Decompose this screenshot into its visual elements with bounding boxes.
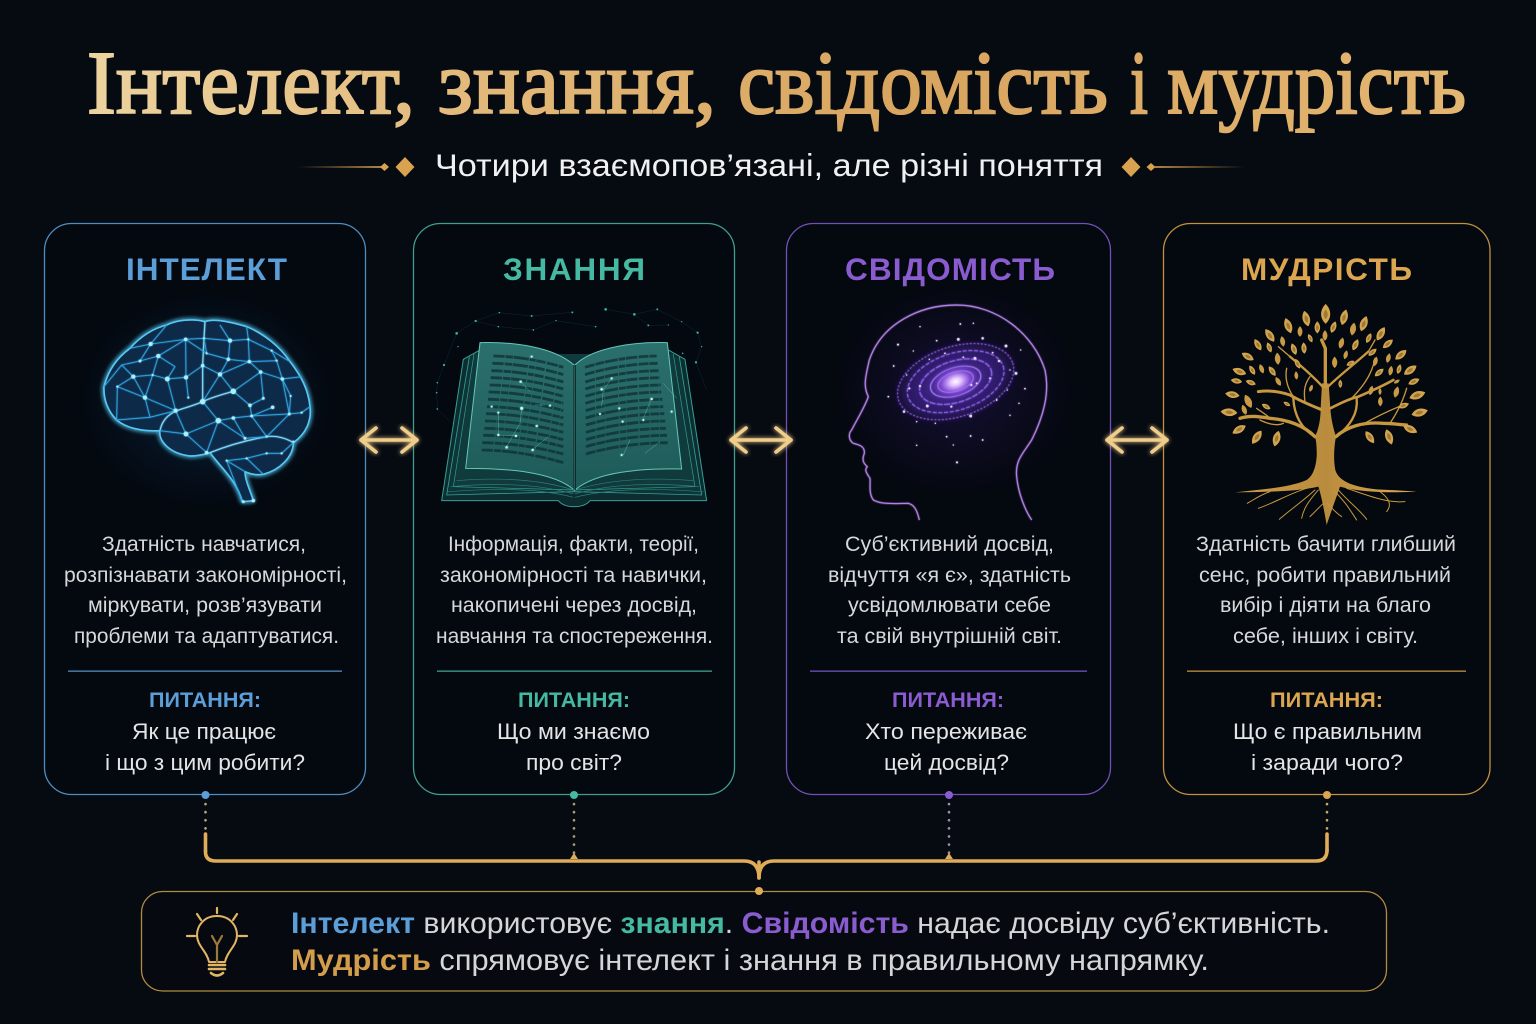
arrow: consciousness to wisdom	[1107, 428, 1167, 452]
icon: light bulb	[187, 908, 247, 976]
question: knowledge: Що ми знаємо	[497, 719, 650, 744]
description: wisdom: вибір і діяти на благо	[1220, 594, 1431, 617]
panel: intellect	[44, 224, 366, 794]
title: мудрість	[1167, 34, 1466, 133]
question: intellect: і що з цим робити?	[105, 750, 305, 775]
description: wisdom: сенс, робити правильний	[1199, 564, 1451, 587]
title: і	[1130, 34, 1148, 133]
description: wisdom: себе, інших і світу.	[1233, 625, 1418, 648]
summary text: Інтелект використовує знання. Свідомість надає досвіду суб’єктивність.	[291, 907, 1330, 940]
question: consciousness: цей досвід?	[884, 750, 1009, 775]
question: knowledge: про світ?	[526, 750, 622, 775]
icon: head with galaxy	[836, 283, 1076, 520]
description: knowledge: накопичені через досвід,	[451, 594, 697, 617]
description: wisdom: Здатність бачити глибший	[1196, 533, 1456, 556]
icon: golden tree	[1220, 304, 1429, 525]
panel: wisdom	[1164, 224, 1490, 794]
question: intellect: Як це працює	[132, 719, 276, 744]
question: wisdom: ПИТАННЯ:	[1270, 689, 1383, 712]
summary text: Мудрість спрямовує інтелект і знання в правильному напрямку.	[291, 944, 1209, 977]
summary text	[291, 907, 1330, 977]
question: consciousness: Хто переживає	[865, 719, 1027, 744]
description: wisdom	[1196, 533, 1456, 648]
description: intellect	[64, 533, 347, 648]
description: consciousness: та свій внутрішній світ.	[837, 625, 1062, 648]
heading: intellect: ІНТЕЛЕКТ	[126, 251, 287, 287]
question: wisdom: і заради чого?	[1251, 750, 1403, 775]
heading: consciousness: СВІДОМІСТЬ	[845, 251, 1055, 287]
description: consciousness: усвідомлювати себе	[848, 594, 1051, 617]
panel: knowledge	[414, 224, 734, 794]
question: intellect: ПИТАННЯ:	[149, 689, 261, 712]
arrow: intellect to knowledge	[361, 428, 417, 452]
subtitle with ornaments	[298, 147, 1245, 183]
description: knowledge: закономірності та навички,	[440, 564, 707, 587]
description: consciousness: відчуття «я є», здатність	[828, 564, 1071, 587]
question: wisdom	[1233, 689, 1422, 775]
question: knowledge: ПИТАННЯ:	[518, 689, 630, 712]
description: intellect: проблеми та адаптуватися.	[74, 625, 339, 648]
question: knowledge	[497, 689, 650, 775]
title: знання,	[438, 34, 716, 133]
description: consciousness: Суб’єктивний досвід,	[845, 533, 1054, 556]
description: consciousness	[828, 533, 1071, 648]
connector bracket	[202, 791, 1331, 878]
heading: knowledge: ЗНАННЯ	[503, 251, 645, 287]
heading: wisdom: МУДРІСТЬ	[1241, 251, 1412, 287]
title	[87, 34, 1466, 133]
description: knowledge: Інформація, факти, теорії,	[448, 533, 699, 556]
icon: open book	[436, 308, 707, 507]
question: intellect	[105, 689, 305, 775]
description: intellect: міркувати, розв’язувати	[88, 594, 322, 617]
panel: consciousness	[786, 224, 1110, 794]
description: knowledge	[436, 533, 713, 648]
arrow: knowledge to consciousness	[731, 428, 791, 452]
title: свідомість	[738, 34, 1108, 133]
description: knowledge: навчання та спостереження.	[436, 625, 713, 648]
description: intellect: розпізнавати закономірності,	[64, 564, 347, 587]
callout: summary	[142, 887, 1386, 991]
question: consciousness: ПИТАННЯ:	[892, 689, 1004, 712]
question: wisdom: Що є правильним	[1233, 719, 1422, 744]
icon: brain network	[77, 290, 337, 510]
question: consciousness	[865, 689, 1027, 775]
description: intellect: Здатність навчатися,	[102, 533, 306, 556]
subtitle with ornaments: Чотири взаємопов’язані, але різні поняття	[435, 147, 1103, 183]
title: Інтелект,	[87, 34, 415, 133]
